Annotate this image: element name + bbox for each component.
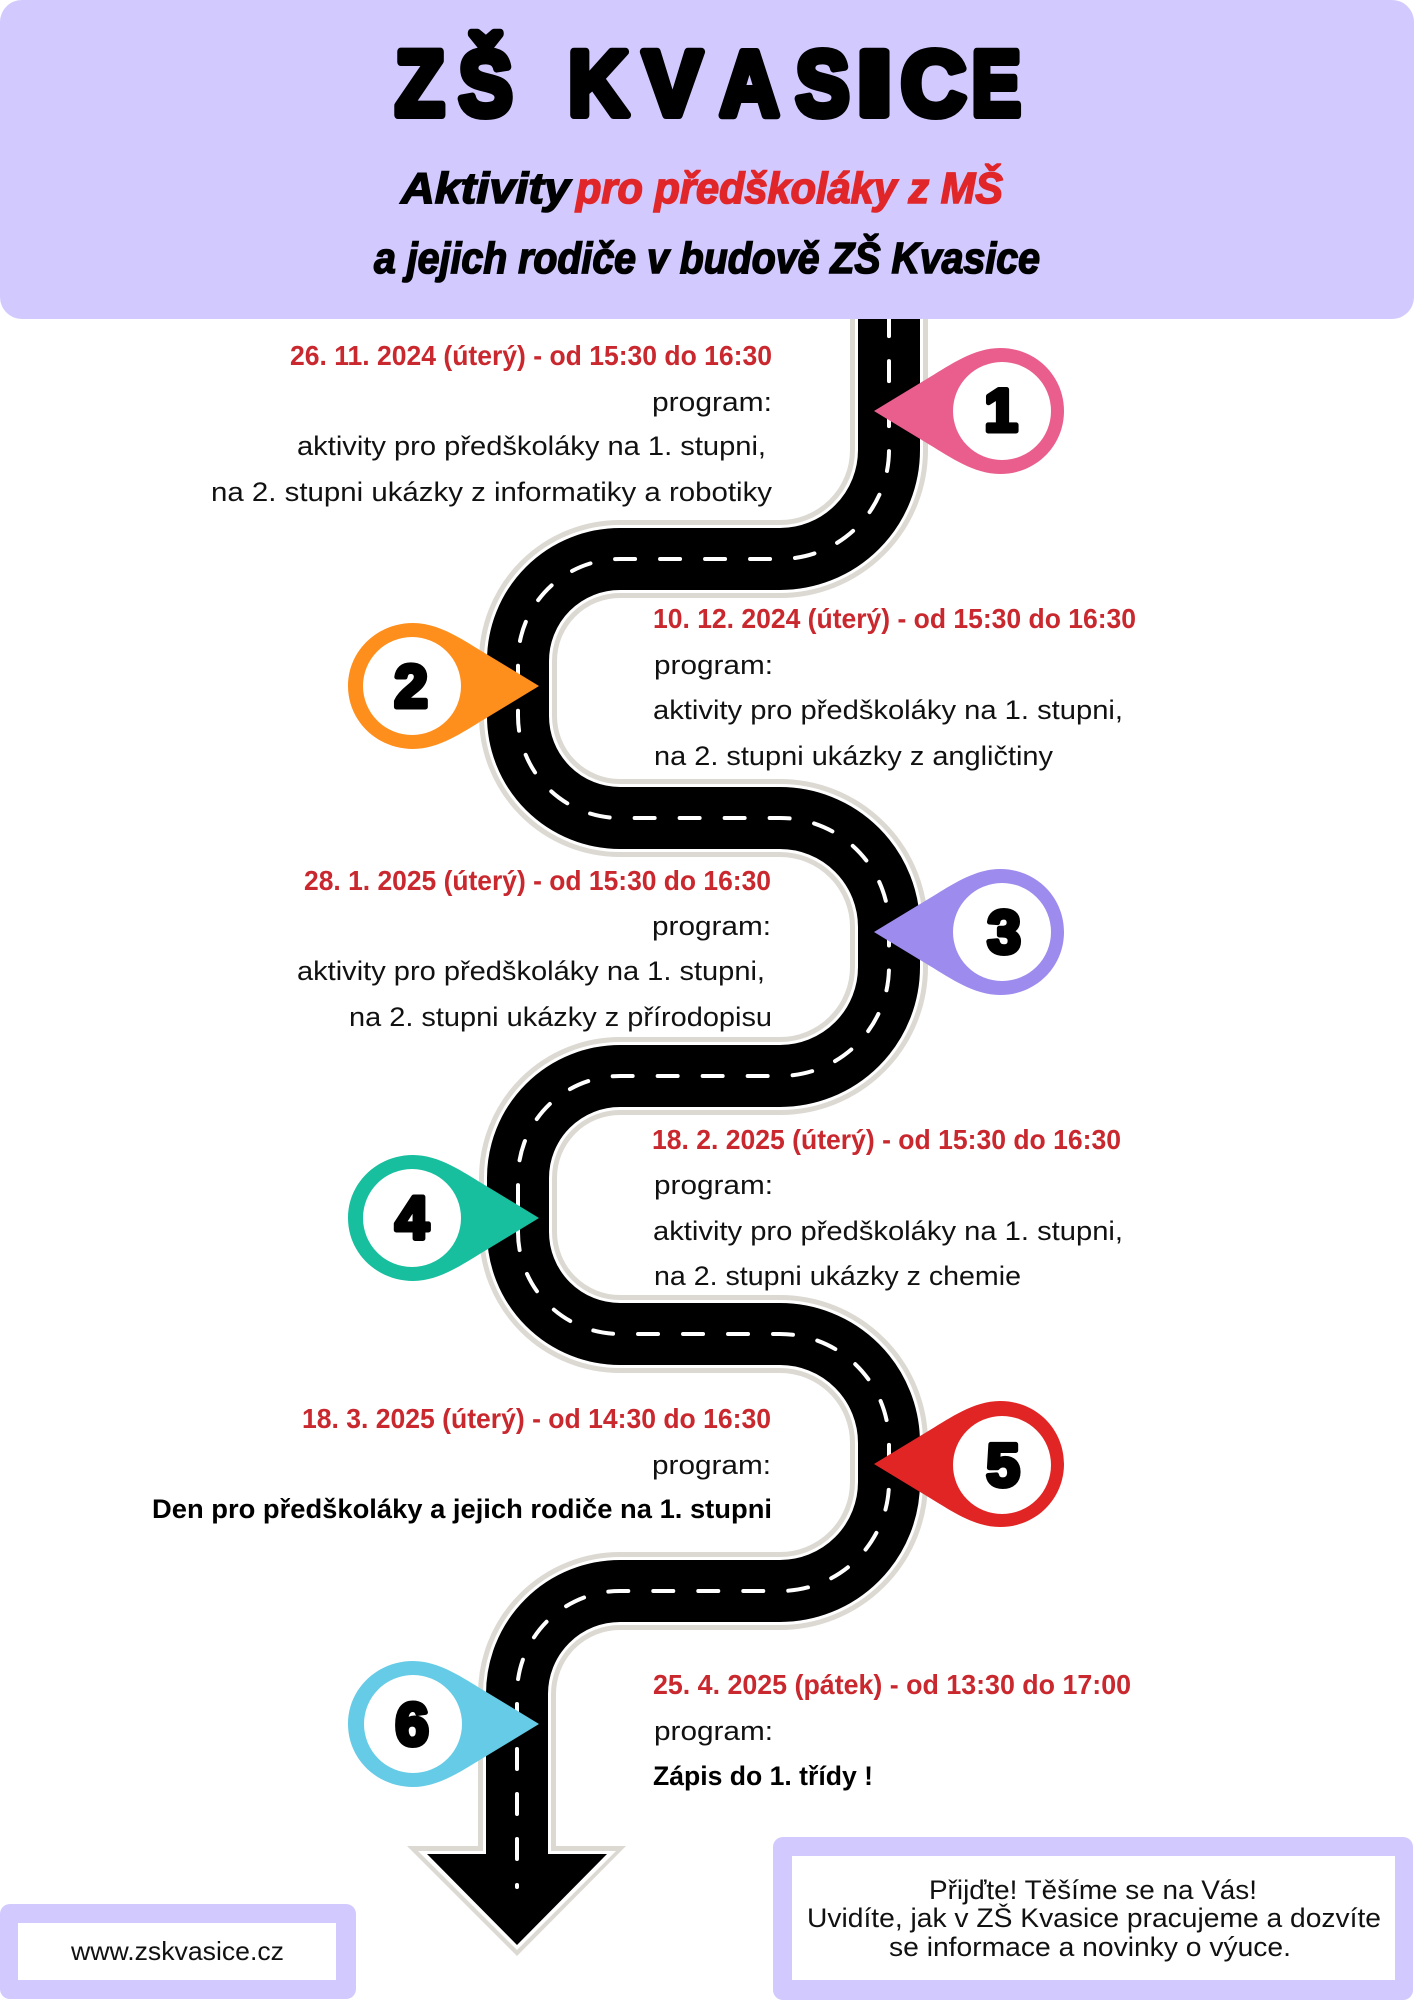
- text block 3: program:: [652, 911, 771, 941]
- invitation box: Přijďte! Těšíme se na Vás!: [929, 1875, 1257, 1905]
- text block 1: na 2. stupni ukázky z informatiky a robotiky: [211, 477, 773, 507]
- invitation box: se informace a novinky o výuce.: [889, 1932, 1291, 1962]
- title: E: [972, 33, 1021, 135]
- pin 6: 6: [395, 1691, 429, 1758]
- winding road with arrow: [407, 300, 889, 1956]
- text block 1: program:: [652, 387, 772, 417]
- title: S: [796, 33, 849, 135]
- title: A: [720, 33, 779, 135]
- subtitle line 1: [400, 162, 1003, 213]
- text block 4: [652, 1124, 1123, 1291]
- text block 6: Zápis do 1. třídy !: [653, 1761, 873, 1791]
- text block 1: aktivity pro předškoláky na 1. stupni,: [297, 431, 766, 461]
- subtitle line 1: pro předškoláky z MŠ: [575, 162, 1003, 213]
- text block 5: 18. 3. 2025 (úterý) - od 14:30 do 16:30: [302, 1403, 771, 1434]
- text block 2: [653, 603, 1136, 771]
- text block 3: 28. 1. 2025 (úterý) - od 15:30 do 16:30: [304, 865, 771, 896]
- pin 5: [874, 1401, 1064, 1527]
- pin 3: 3: [987, 899, 1021, 966]
- text block 2: 10. 12. 2024 (úterý) - od 15:30 do 16:30: [653, 603, 1136, 634]
- text block 4: na 2. stupni ukázky z chemie: [654, 1261, 1021, 1291]
- text block 2: aktivity pro předškoláky na 1. stupni,: [653, 695, 1123, 725]
- subtitle line 1: Aktivity: [400, 164, 573, 213]
- pin 4: 4: [395, 1184, 429, 1252]
- pin 5: 5: [986, 1432, 1020, 1499]
- title: I: [856, 33, 893, 135]
- text block 3: na 2. stupni ukázky z přírodopisu: [349, 1002, 772, 1032]
- title: Z: [395, 33, 444, 135]
- title: [395, 32, 1021, 135]
- text block 3: aktivity pro předškoláky na 1. stupni,: [297, 956, 765, 986]
- header panel: [0, 0, 1414, 319]
- title: K: [568, 33, 628, 135]
- pin 2: 2: [394, 653, 428, 720]
- text block 6: 25. 4. 2025 (pátek) - od 13:30 do 17:00: [653, 1669, 1131, 1700]
- pin 2: [348, 623, 539, 749]
- text block 5: program:: [652, 1450, 771, 1480]
- invitation box: [773, 1837, 1413, 2000]
- text block 5: [152, 1403, 772, 1524]
- text block 6: program:: [654, 1716, 773, 1746]
- text block 5: Den pro předškoláky a jejich rodiče na 1. stupni: [152, 1494, 772, 1524]
- pin 1: [874, 348, 1064, 474]
- invitation box: Uvidíte, jak v ZŠ Kvasice pracujeme a dozvíte: [807, 1902, 1381, 1933]
- text block 4: 18. 2. 2025 (úterý) - od 15:30 do 16:30: [652, 1124, 1121, 1155]
- text block 4: aktivity pro předškoláky na 1. stupni,: [653, 1216, 1123, 1246]
- pin 4: [348, 1155, 539, 1281]
- pin 1: 1: [984, 377, 1018, 444]
- text block 2: na 2. stupni ukázky z angličtiny: [654, 741, 1054, 771]
- pin 3: [874, 869, 1064, 995]
- text block 2: program:: [654, 650, 773, 680]
- text block 6: [653, 1669, 1131, 1791]
- subtitle line 2: a jejich rodiče v budově ZŠ Kvasice: [374, 232, 1040, 283]
- text block 1: [211, 340, 773, 507]
- pin 6: [348, 1661, 539, 1787]
- text block 3: [297, 865, 772, 1032]
- title: Š: [459, 32, 512, 135]
- website box: [0, 1904, 356, 1999]
- website box: www.zskvasice.cz: [70, 1936, 284, 1966]
- text block 1: 26. 11. 2024 (úterý) - od 15:30 do 16:30: [290, 340, 772, 371]
- title: C: [901, 33, 966, 135]
- title: V: [643, 33, 702, 135]
- text block 4: program:: [654, 1170, 773, 1200]
